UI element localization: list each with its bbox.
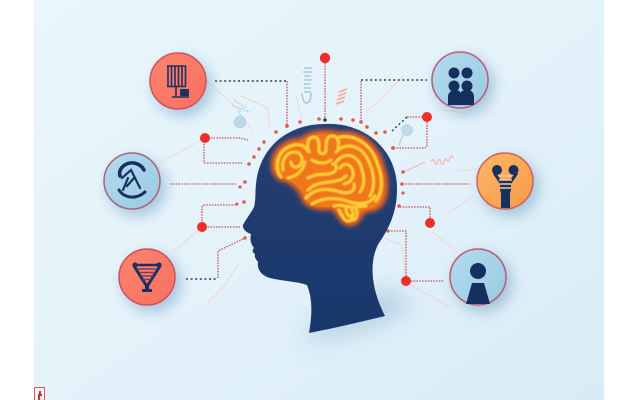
brain <box>271 130 388 226</box>
brain folds <box>277 136 381 221</box>
icon circle: four people, top right <box>432 52 494 115</box>
icon circle: circular arrows, middle left <box>104 153 166 216</box>
icon circle: person, bottom right <box>450 249 512 312</box>
ring of small red dots <box>236 117 405 240</box>
pale icon: right bulb <box>399 125 412 145</box>
node: large red dots <box>197 53 435 286</box>
icon circle: funnel, bottom left <box>119 249 181 312</box>
faint connector lines <box>160 75 477 308</box>
pale icon: top pink coil <box>336 89 347 104</box>
corner badge <box>34 388 44 400</box>
brain glow <box>271 130 388 226</box>
icon circle: radiator chart, top left <box>150 53 212 116</box>
dark dotted lines <box>186 80 427 279</box>
red dotted lines <box>170 60 470 281</box>
icon circle: helix figure, middle right <box>477 153 539 216</box>
circuit lines <box>170 60 470 281</box>
pale icon: top spring <box>302 68 312 103</box>
head shadow <box>300 288 412 342</box>
head silhouette <box>243 124 397 333</box>
pale icon: right pink squiggle <box>404 156 453 172</box>
pale icon: left bulb <box>232 100 250 128</box>
brain body <box>274 134 384 223</box>
